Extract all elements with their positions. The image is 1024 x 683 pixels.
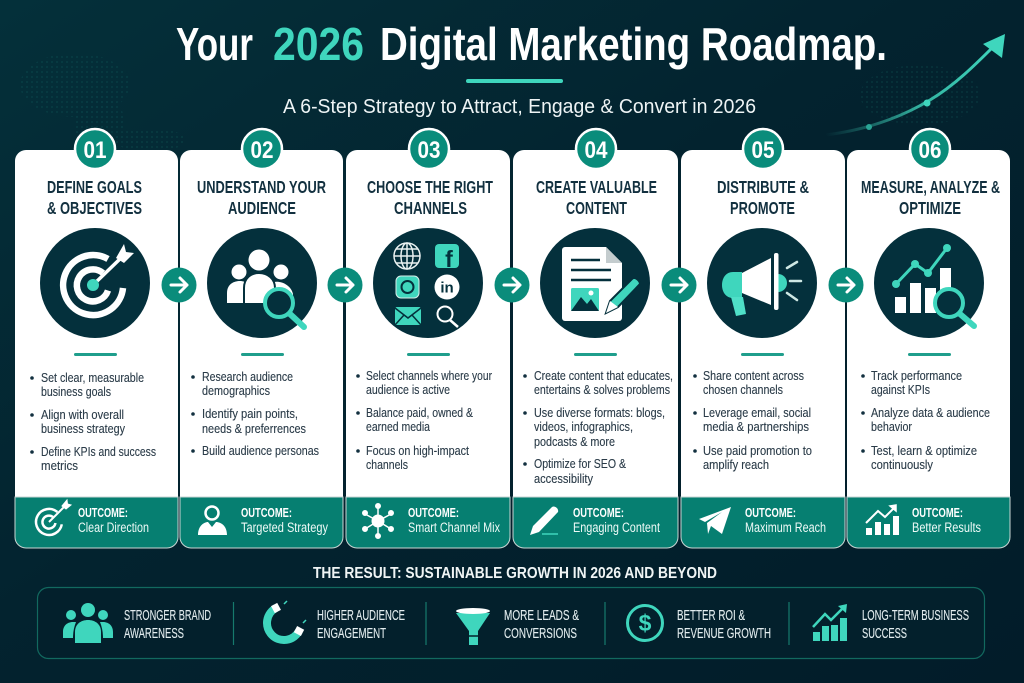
title underline: [466, 79, 563, 83]
step number: [409, 129, 449, 169]
outcome text: [78, 505, 149, 535]
bullet list: demographics: [202, 383, 270, 398]
result text: [317, 608, 405, 642]
title: [176, 18, 887, 70]
outcome text: [408, 505, 500, 535]
bullet list: Track performance: [871, 368, 962, 383]
bullet list: channels: [366, 457, 408, 472]
step number: 06: [918, 137, 942, 164]
heading: PROMOTE: [730, 198, 795, 218]
arrow: step 4 to 5: [662, 268, 696, 302]
bullet list: Focus on high-impact: [366, 443, 469, 458]
bullet list: Share content across: [703, 368, 804, 383]
bullet list: Align with overall: [41, 407, 124, 422]
heading: & OBJECTIVES: [47, 198, 142, 218]
bullet list: behavior: [871, 419, 913, 434]
result text: STRONGER BRAND: [124, 608, 211, 624]
bullet list: videos, infographics,: [534, 419, 633, 434]
divider: [407, 353, 450, 356]
title: Digital Marketing Roadmap.: [380, 18, 887, 70]
bullet list: needs & preferrences: [202, 421, 306, 436]
result text: HIGHER AUDIENCE: [317, 608, 405, 624]
outcome text: OUTCOME:: [745, 505, 796, 520]
bullet list: audience is active: [366, 382, 450, 397]
bullet list: Identify pain points,: [202, 406, 298, 421]
panel: step 4: [513, 129, 678, 548]
icon: people: [63, 603, 113, 643]
bullet list: Optimize for SEO &: [534, 456, 626, 471]
bullet list: chosen channels: [703, 382, 783, 397]
result text: LONG-TERM BUSINESS: [862, 608, 969, 624]
result text: [677, 608, 771, 642]
bullet list: earned media: [366, 419, 431, 434]
icon: funnel: [456, 608, 490, 645]
icon: outcome chart: [866, 505, 899, 535]
bullet list: [523, 368, 673, 486]
step number: 02: [250, 137, 274, 164]
panel: step 6: [847, 129, 1010, 548]
icon: growth arrow: [826, 34, 1005, 135]
heading: CONTENT: [566, 198, 627, 218]
heading: UNDERSTAND YOUR: [197, 177, 326, 197]
result text: [504, 608, 579, 642]
icon: channels: [373, 228, 483, 338]
heading: [47, 177, 142, 218]
bullet list: Balance paid, owned &: [366, 405, 473, 420]
icon: dollar: $: [639, 610, 652, 636]
icon: outcome person: [198, 506, 227, 535]
arrow: step 2 to 3: [328, 268, 362, 302]
outcome text: [745, 505, 826, 535]
result text: AWARENESS: [124, 626, 184, 642]
heading: [197, 177, 326, 218]
step number: 01: [84, 137, 106, 164]
outcome text: OUTCOME:: [408, 505, 459, 520]
bullet list: against KPIs: [871, 382, 930, 397]
divider: [74, 353, 117, 356]
divider: [241, 353, 284, 356]
step number: [75, 129, 115, 169]
bullet list: metrics: [41, 458, 78, 473]
title: 2026: [273, 18, 364, 70]
icon: target: [40, 228, 150, 338]
heading: [861, 177, 1000, 218]
bullet list: Use diverse formats: blogs,: [534, 405, 665, 420]
panel: step 2: [180, 129, 343, 548]
divider: [574, 353, 617, 356]
heading: AUDIENCE: [228, 198, 296, 218]
bullet list: Use paid promotion to: [703, 443, 812, 458]
bullet list: Define KPIs and success: [41, 444, 156, 459]
bullet list: [30, 370, 156, 473]
result text: MORE LEADS &: [504, 608, 579, 624]
icon: growth chart: [813, 604, 847, 641]
step number: [743, 129, 783, 169]
icon: megaphone: [707, 228, 817, 338]
bullet list: media & partnerships: [703, 419, 809, 434]
icon: outcome paper plane: [699, 507, 731, 534]
panel: step 1: [15, 129, 178, 548]
icon: outcome target: [36, 500, 71, 535]
outcome text: [241, 505, 328, 535]
outcome text: [912, 505, 981, 535]
icon: analytics: [874, 228, 984, 338]
outcome text: OUTCOME:: [912, 505, 963, 520]
outcome text: Better Results: [912, 520, 981, 535]
outcome text: Smart Channel Mix: [408, 520, 500, 535]
bullet list: [693, 368, 812, 472]
bullet list: Research audience: [202, 369, 293, 384]
bullet list: Leverage email, social: [703, 405, 811, 420]
result text: CONVERSIONS: [504, 626, 577, 642]
bullet list: Test, learn & optimize: [871, 443, 977, 458]
result text: REVENUE GROWTH: [677, 626, 771, 642]
heading: OPTIMIZE: [899, 198, 961, 218]
outcome text: [573, 505, 660, 535]
result text: BETTER ROI &: [677, 608, 745, 624]
step number: 03: [418, 137, 440, 164]
step number: 05: [752, 137, 774, 164]
outcome text: Engaging Content: [573, 520, 660, 535]
outcome text: Maximum Reach: [745, 520, 826, 535]
panel: step 3: [346, 129, 510, 548]
subtitle: A 6-Step Strategy to Attract, Engage & Convert in 2026: [283, 96, 756, 118]
bullet list: business strategy: [41, 421, 125, 436]
step number: 04: [584, 137, 608, 164]
heading: CHANNELS: [394, 198, 467, 218]
icon: dollar: [628, 606, 662, 640]
bullet list: podcasts & more: [534, 434, 615, 449]
icon: channels: in: [440, 280, 454, 296]
panel: step 5: [681, 129, 845, 548]
bullet list: accessibility: [534, 471, 593, 486]
heading: DISTRIBUTE &: [717, 177, 809, 197]
icon: audience search: [207, 228, 317, 338]
divider: [741, 353, 784, 356]
bullet list: Build audience personas: [202, 443, 319, 458]
step number: [910, 129, 950, 169]
outcome text: Clear Direction: [78, 520, 149, 535]
bullet list: business goals: [41, 384, 111, 399]
heading: CHOOSE THE RIGHT: [367, 177, 493, 197]
icon: outcome pencil: [530, 506, 558, 535]
icon: channels: f: [445, 246, 453, 272]
bullet list: Set clear, measurable: [41, 370, 144, 385]
outcome text: Targeted Strategy: [241, 520, 328, 535]
bullet list: Create content that educates,: [534, 368, 673, 383]
icon: magnet: [267, 601, 306, 640]
icon: document and pencil: [540, 228, 650, 338]
bullet list: [356, 368, 493, 472]
bullet list: entertains & solves problems: [534, 382, 670, 397]
heading: CREATE VALUABLE: [536, 177, 657, 197]
arrow: step 5 to 6: [828, 268, 864, 302]
result text: SUCCESS: [862, 626, 907, 642]
result text: [124, 608, 211, 642]
result text: ENGAGEMENT: [317, 626, 386, 642]
divider: [908, 353, 951, 356]
bullet list: Select channels where your: [366, 368, 493, 383]
arrow: step 3 to 4: [494, 268, 530, 302]
result text: [862, 608, 969, 642]
step number: [576, 129, 616, 169]
title: Your: [176, 18, 253, 70]
panel: results: [38, 588, 984, 658]
bullet list: [861, 368, 990, 472]
bullet list: Analyze data & audience: [871, 405, 990, 420]
arrow: step 1 to 2: [162, 268, 196, 302]
heading: DEFINE GOALS: [47, 177, 142, 197]
step number: [242, 129, 282, 169]
bullet list: amplify reach: [703, 457, 769, 472]
icon: outcome network: [362, 504, 394, 538]
result heading: THE RESULT: SUSTAINABLE GROWTH IN 2026 AND BEYOND: [313, 565, 717, 582]
heading: [367, 177, 493, 218]
heading: [717, 177, 809, 218]
bullet list: [191, 369, 319, 458]
bullet list: continuously: [871, 457, 933, 472]
outcome text: OUTCOME:: [573, 505, 624, 520]
outcome text: OUTCOME:: [241, 505, 292, 520]
heading: [536, 177, 657, 218]
outcome text: OUTCOME:: [78, 505, 128, 520]
